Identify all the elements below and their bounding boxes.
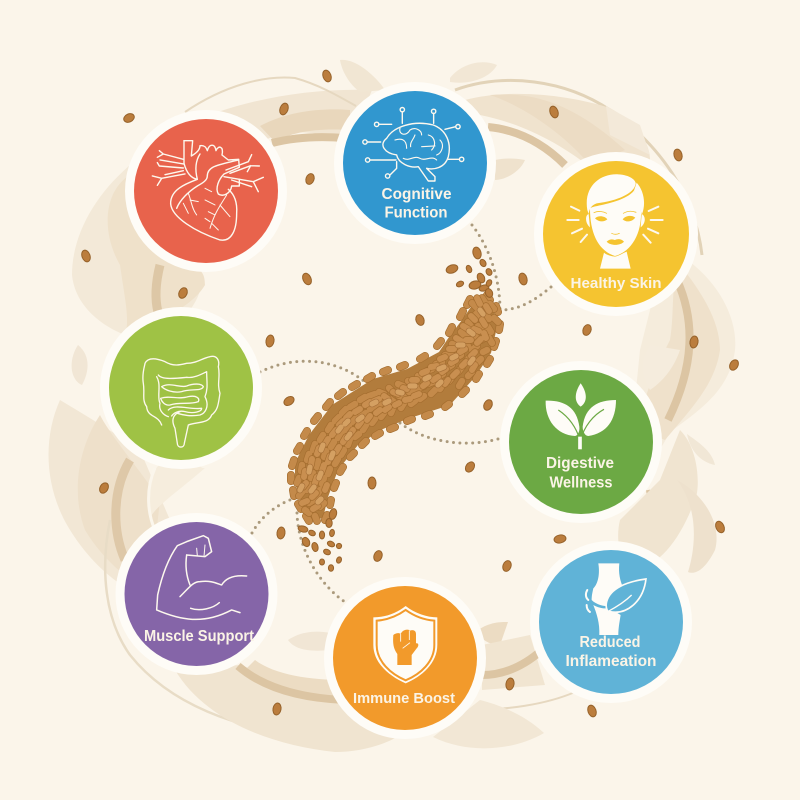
label: digestive wellness [546,455,614,492]
panel: reduced inflammation [530,541,692,703]
label: immune boost: Immune Boost [353,690,455,707]
label: digestive wellness: Wellness [550,474,612,492]
upper-left leaves [72,165,205,385]
panel: gut health [100,307,262,469]
panel: heart health [125,110,287,272]
icon: leafy sprout [546,383,616,449]
top-right wreath band [450,62,702,255]
dotted connector: immune to grains [297,513,345,602]
label: cognitive function [382,186,452,222]
label: cognitive function: Cognitive [382,186,452,203]
top-left wreath band [185,60,385,145]
label: reduced inflammation: Inflameation [566,653,656,670]
dotted connector: muscle to grains [252,498,295,533]
icon: shield with fist [373,606,437,683]
dotted connector: brain to grains [472,225,500,310]
lower-left leaves [49,400,355,733]
dotted connector: gut to grains [260,361,365,382]
panel: digestive wellness [500,361,662,523]
icon: circuit brain [363,107,464,181]
icon: glowing face [567,174,663,269]
panel: healthy skin [534,152,698,316]
bottom wreath band [175,632,400,752]
label: muscle support: Muscle Support [144,628,254,645]
bottom-right wreath band [433,622,575,748]
icon: joint with leaf [586,563,646,635]
right side leaves [618,262,735,573]
scattered seeds [80,69,740,718]
dotted connector: digestive to grains [400,423,498,443]
label: digestive wellness: Digestive [546,455,614,472]
panel: cognitive function [334,82,496,244]
label: cognitive function: Function [384,204,448,222]
central grain stream [291,295,500,521]
icon: heart [152,141,263,240]
label: reduced inflammation [566,634,656,670]
label: healthy skin: Healthy Skin [570,275,662,292]
panel: muscle support [116,513,278,675]
panel: immune boost [324,577,486,739]
dotted connector: skin to grains [500,287,551,310]
label: reduced inflammation: Reduced [580,634,640,651]
icon: flexed arm [157,536,247,619]
background swirl ring and leaves [49,60,735,752]
icon: intestines [143,356,220,447]
